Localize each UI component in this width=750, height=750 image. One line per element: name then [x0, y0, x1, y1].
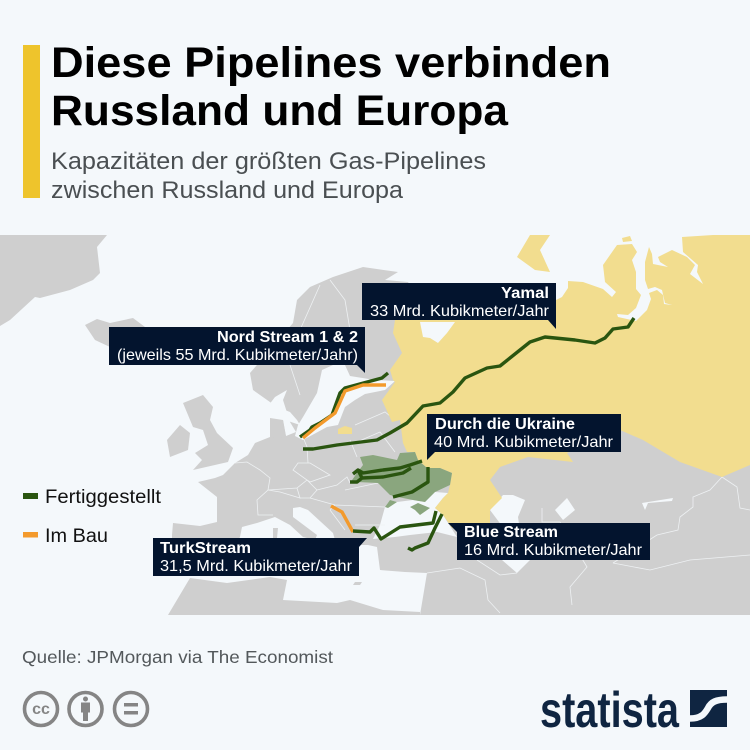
- land: Ukraine: [350, 452, 452, 515]
- pipeline: Blue Stream: [408, 514, 442, 550]
- map: [0, 235, 750, 615]
- licence icons: [24, 692, 148, 726]
- yellow accent bar: [23, 45, 40, 198]
- label: TurkStream: TurkStream: [160, 540, 251, 557]
- sea: Kattegat: [265, 390, 296, 436]
- label: Durch die Ukraine: [427, 414, 621, 460]
- land: Novaya Zemlya: [517, 235, 632, 272]
- icon: statista mark: [690, 690, 727, 727]
- label: Nord Stream: [109, 327, 365, 373]
- label: Blue Stream: [448, 523, 650, 560]
- title: [51, 39, 611, 135]
- label: Yamal: 33 Mrd. Kubikmeter/Jahr: [370, 303, 550, 320]
- icon: cc: cc: [32, 701, 50, 718]
- sea: Black Sea: [373, 492, 457, 539]
- statista logo: statista: [540, 682, 680, 738]
- islands: [273, 528, 362, 585]
- sea: Baltic: [295, 365, 395, 440]
- subtitle: zwischen Russland und Europa: [51, 177, 404, 204]
- pipelines: through Ukraine: [350, 461, 428, 497]
- label: Nord Stream: Nord Stream 1 & 2: [217, 329, 358, 346]
- land: Ireland: [167, 425, 190, 457]
- label: Yamal: Yamal: [501, 285, 549, 302]
- legend: under construction: Im Bau: [45, 526, 108, 547]
- label: Nord Stream: (jeweils 55 Mrd. Kubikmeter/Jahr): [117, 347, 358, 364]
- subtitle: Kapazitäten der größten Gas-Pipelines: [51, 148, 486, 175]
- label: TurkStream: 31,5 Mrd. Kubikmeter/Jahr: [160, 558, 353, 575]
- land: Kaliningrad: [338, 426, 352, 434]
- sea: Aral and Balkhash: [555, 498, 673, 520]
- sea: White Sea: [420, 322, 455, 343]
- label: Blue Stream: 16 Mrd. Kubikmeter/Jahr: [464, 542, 643, 559]
- land: North Africa: [168, 577, 420, 615]
- pipeline: Nord Stream 2 orange: [303, 385, 386, 438]
- pipeline: Nord Stream green: [300, 373, 388, 437]
- label: Durch die Ukraine: Durch die Ukraine: [435, 416, 575, 433]
- label: Blue Stream: Blue Stream: [464, 524, 558, 541]
- source: Quelle: JPMorgan via The Economist: [22, 647, 333, 667]
- land: Iceland: [85, 318, 145, 347]
- land: Greenland: [0, 235, 107, 326]
- sea: Caspian: [490, 495, 530, 573]
- land: Russia: [382, 235, 750, 528]
- title: Russland und Europa: [51, 87, 509, 135]
- legend: [23, 487, 162, 547]
- pipeline: TurkStream: [353, 511, 436, 539]
- pipeline: Yamal: [303, 318, 634, 449]
- label: Yamal: [362, 283, 556, 329]
- land: Europe and Asia: [172, 267, 750, 615]
- subtitle: [51, 148, 486, 204]
- label: Durch die Ukraine: 40 Mrd. Kubikmeter/Jahr: [434, 434, 614, 451]
- land: Denmark: [270, 418, 286, 438]
- legend: completed: Fertiggestellt: [45, 487, 162, 508]
- pipeline: TurkStream under construction: [331, 506, 353, 532]
- country borders: [235, 280, 750, 613]
- label: TurkStream: [153, 538, 367, 576]
- icon: equals: [114, 692, 148, 726]
- icon: attribution: [69, 692, 102, 726]
- title: Diese Pipelines verbinden: [51, 39, 611, 87]
- land: Great Britain: [183, 395, 233, 470]
